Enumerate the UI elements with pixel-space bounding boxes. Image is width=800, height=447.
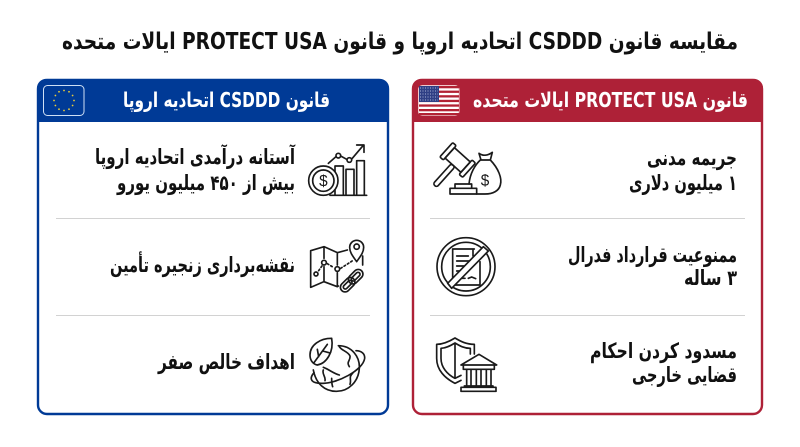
divider: [430, 218, 745, 220]
text: civil penalty: [629, 146, 737, 195]
divider: [430, 314, 745, 316]
panel heading: EU: قانون CSDDD اتحادیه اروپا: [123, 88, 330, 112]
icon: revenue chart with coin: $: [319, 173, 328, 190]
text: revenue threshold: بیش از ۴۵۰ میلیون یورو: [116, 171, 295, 195]
text: civil penalty: جریمه مدنی: [647, 146, 737, 170]
text: blocking foreign judgments: [590, 339, 737, 387]
icon: gavel and money bag: [423, 143, 501, 196]
panel header: US: [412, 79, 763, 122]
panel header: EU: [37, 79, 389, 122]
divider: [56, 218, 370, 220]
panel: EU CSDDD law: [37, 79, 389, 414]
icon: gavel and money bag: $: [481, 172, 490, 189]
text: civil penalty: ۱ میلیون دلاری: [629, 171, 737, 195]
panel heading: US: قانون PROTECT USA ایالات متحده: [473, 88, 748, 112]
text: net zero goals: اهداف خالص صفر: [157, 350, 295, 374]
icon: US flag: [418, 86, 459, 116]
text: blocking foreign judgments: مسدود کردن احکام: [590, 339, 737, 363]
panel: US PROTECT USA law: [412, 79, 763, 414]
text: federal contract ban: ۳ ساله: [684, 266, 737, 290]
icon: EU flag: [44, 86, 84, 116]
title: مقایسه قانون CSDDD اتحادیه اروپا و قانون PROTECT USA ایالات متحده: [62, 29, 738, 55]
text: federal contract ban: [568, 243, 737, 290]
text: supply chain mapping: نقشه‌برداری زنجیره تأمین: [110, 250, 295, 277]
divider: [56, 314, 370, 316]
text: blocking foreign judgments: قضایی خارجی: [632, 363, 737, 387]
icon: prohibited contract: [437, 238, 495, 296]
icon: map with pin and chain: [311, 240, 365, 294]
icon: globe with leaf: [310, 338, 365, 391]
text: revenue threshold: [95, 144, 296, 195]
text: revenue threshold: آستانه درآمدی اتحادیه اروپا: [95, 144, 296, 169]
icon: shield and courthouse: [437, 338, 497, 391]
icon: revenue chart with coin: [309, 145, 367, 195]
